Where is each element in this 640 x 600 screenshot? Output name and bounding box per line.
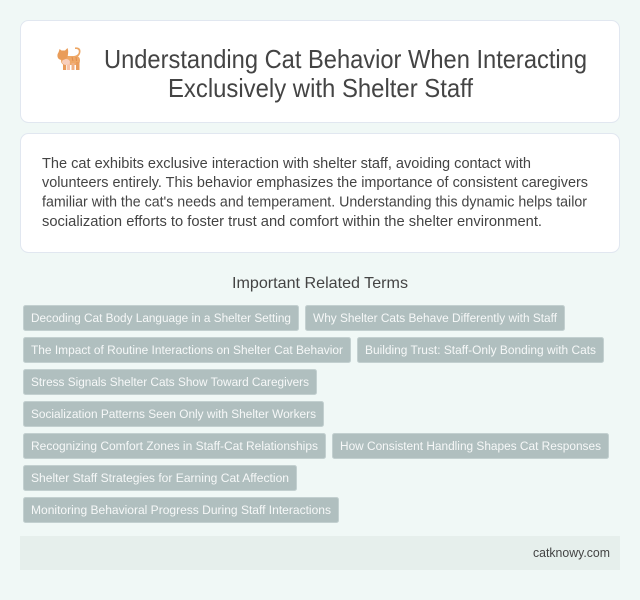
tag: Building Trust: Staff-Only Bonding with Cats	[365, 343, 596, 357]
tag	[24, 466, 296, 490]
tag: The Impact of Routine Interactions on Shelter Cat Behavior	[31, 343, 343, 357]
tag: Shelter Staff Strategies for Earning Cat Affection	[31, 471, 289, 485]
text block: description	[42, 156, 588, 230]
tag: How Consistent Handling Shapes Cat Responses	[340, 439, 601, 453]
tag: Recognizing Comfort Zones in Staff-Cat Relationships	[31, 439, 318, 453]
text block: description: socialization efforts to foster trust and comfort within the shelter environment.	[42, 214, 542, 230]
title: Understanding Cat Behavior When Interacting	[104, 46, 587, 74]
tag	[332, 434, 608, 458]
text block: description: The cat exhibits exclusive interaction with shelter staff, avoiding contact with	[42, 156, 531, 172]
title	[104, 46, 587, 103]
title: Exclusively with Shelter Staff	[168, 75, 474, 103]
tag	[24, 498, 338, 522]
text block: description: volunteers entirely. This behavior emphasizes the importance of consistent caregivers	[42, 175, 588, 191]
tag	[306, 306, 564, 330]
tag	[358, 338, 604, 362]
footer: catknowy.com	[533, 545, 610, 560]
tag: Why Shelter Cats Behave Differently with Staff	[313, 311, 558, 325]
tag: Socialization Patterns Seen Only with Shelter Workers	[31, 407, 316, 421]
footer	[20, 536, 620, 570]
tags: related terms	[24, 306, 608, 522]
tag: Decoding Cat Body Language in a Shelter Setting	[31, 311, 291, 325]
tag	[24, 370, 316, 394]
tag	[24, 434, 326, 458]
tag	[24, 306, 298, 330]
panel: title card	[20, 20, 620, 122]
tag	[24, 402, 324, 426]
tag: Monitoring Behavioral Progress During Staff Interactions	[31, 503, 331, 517]
tag: Stress Signals Shelter Cats Show Toward Caregivers	[31, 375, 309, 389]
text block: description: familiar with the cat's needs and temperament. Understanding this dynamic helps tailor	[42, 194, 587, 210]
heading: related terms: Important Related Terms	[232, 275, 408, 292]
panel: description	[20, 134, 620, 252]
icon: cat	[57, 47, 80, 70]
tag	[24, 338, 350, 362]
